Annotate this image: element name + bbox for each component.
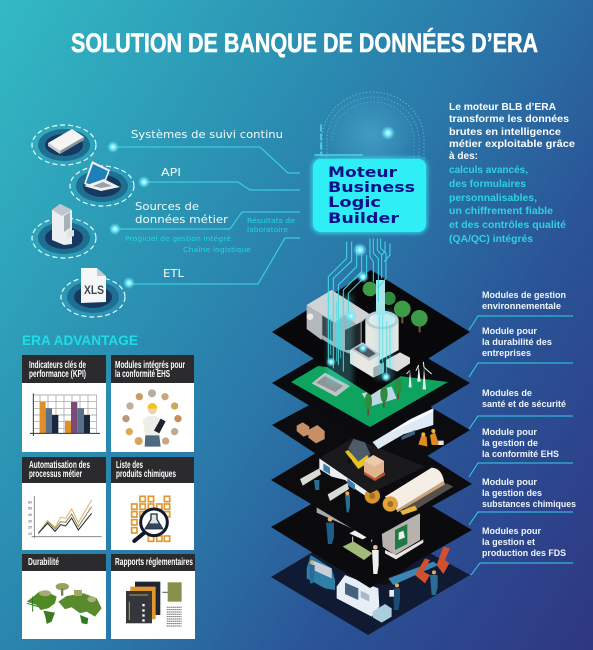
label: chemicals: Module pour xyxy=(482,477,537,487)
icon: laptop xyxy=(70,161,134,206)
card: chemicals list: Liste des xyxy=(116,460,143,471)
line chart: 60 xyxy=(28,500,32,504)
layer 5: recycling and shipping xyxy=(271,470,472,588)
label: environmental: environnementale xyxy=(482,301,561,311)
trees xyxy=(363,282,428,332)
icon: XLS file xyxy=(61,268,125,317)
label: business data sources: données métier xyxy=(135,214,229,226)
label: EHS compliance: la conformité EHS xyxy=(482,449,559,459)
forklift xyxy=(345,439,370,469)
card: KPI xyxy=(22,355,106,452)
label: sustainability xyxy=(482,326,552,358)
label: ERP: Progiciel de gestion intégré xyxy=(125,235,231,243)
layer 2: green park and wind xyxy=(272,325,470,443)
line chart: 20 xyxy=(28,526,32,530)
white wall with bays xyxy=(319,458,370,499)
text block: engine description: (QA/QC) intégrés xyxy=(449,233,533,245)
card: KPI: Indicateurs clés de xyxy=(29,360,86,371)
label: sustainability: la durabilité des xyxy=(482,337,552,347)
icon: green world map xyxy=(27,583,102,624)
label: API: API xyxy=(161,167,181,179)
card: process automation: processus métier xyxy=(29,469,82,480)
engine: dotted dome xyxy=(315,91,424,179)
line chart: 10 xyxy=(28,532,32,536)
label: laboratory results: Résultats de xyxy=(247,217,295,225)
label: chemicals: la gestion des xyxy=(482,488,542,498)
label: SDS: production des FDS xyxy=(482,548,566,558)
workers xyxy=(314,480,350,512)
text block: engine description xyxy=(449,101,575,245)
text block: engine description: et des contrôles qualité xyxy=(449,219,566,231)
label: environmental xyxy=(482,290,566,311)
text block: engine description: un chiffrement fiable xyxy=(449,205,553,217)
boiler building xyxy=(307,290,370,358)
icon: monitoring device xyxy=(32,125,96,165)
circuit glow nodes xyxy=(326,243,391,382)
card: sustainability: Durabilité xyxy=(28,557,59,568)
orange workers xyxy=(418,429,444,447)
icon: XLS file: XLS xyxy=(84,283,104,297)
line chart: 30 xyxy=(28,519,32,523)
bar chart xyxy=(30,393,100,436)
label: ETL: ETL xyxy=(163,268,184,280)
engine: Moteur Business Logic Builder box xyxy=(312,158,427,233)
card: process automation: Automatisation des xyxy=(29,460,90,471)
label: health and safety xyxy=(482,388,566,409)
card: regulatory reports xyxy=(111,554,195,639)
label: sustainability: Module pour xyxy=(482,326,537,336)
icon: magnifier over flask xyxy=(132,496,170,541)
raised roof xyxy=(319,438,425,493)
rolls xyxy=(365,468,453,515)
label: EHS compliance: Module pour xyxy=(482,427,537,437)
service building xyxy=(350,342,410,378)
icon: server tower xyxy=(32,204,96,258)
engine: Moteur Business Logic Builder box: Logic xyxy=(328,195,381,211)
label: health and safety: Modules de xyxy=(482,388,532,398)
text block: engine description: brutes en intelligence xyxy=(449,126,561,138)
text block: engine description: personnalisables, xyxy=(449,192,537,204)
icon: report stack xyxy=(126,582,182,626)
card: regulatory reports: Rapports réglementaires xyxy=(115,557,193,568)
text block: engine description: transforme les données xyxy=(449,113,569,125)
label: EHS compliance: la gestion de xyxy=(482,438,538,448)
line chart xyxy=(28,496,102,538)
white wall xyxy=(369,408,433,449)
layer 4: warehouse and rolls xyxy=(271,420,472,540)
label: environmental: Modules de gestion xyxy=(482,290,566,300)
text block: engine description: Le moteur BLB d’ERA xyxy=(449,101,556,113)
label: business data sources xyxy=(135,201,229,226)
panel: data sources xyxy=(32,125,300,317)
card: KPI: performance (KPI) xyxy=(29,369,86,380)
label: health and safety: santé et de sécurité xyxy=(482,399,566,409)
connector glow dots xyxy=(107,141,150,289)
heading: ERA ADVANTAGE xyxy=(22,332,138,348)
text block: engine description: calculs avancés, xyxy=(449,164,528,176)
engine: Moteur Business Logic Builder box: Business xyxy=(328,180,415,196)
layer 6: production floor xyxy=(271,519,470,635)
layer 1: plant xyxy=(272,270,470,395)
card: process automation xyxy=(22,457,106,550)
silo xyxy=(365,311,399,360)
engine: Moteur Business Logic Builder box: Moteur xyxy=(328,165,398,181)
layer 3: yard and loading xyxy=(272,372,470,493)
card: chemicals list: produits chimiques xyxy=(116,469,176,480)
storage machines xyxy=(300,468,349,501)
card: sustainability xyxy=(22,554,106,639)
label: SDS xyxy=(482,526,566,558)
text block: engine description: des formulaires xyxy=(449,178,526,190)
label: EHS compliance xyxy=(482,427,559,459)
label: chemicals xyxy=(482,477,576,509)
card: EHS modules xyxy=(111,355,194,452)
label: laboratory results xyxy=(247,217,295,234)
card: EHS modules: la conformité EHS xyxy=(115,369,170,380)
card: chemicals list xyxy=(111,457,194,550)
panel: ERA advantage xyxy=(22,332,195,639)
label: business data sources: Sources de xyxy=(135,201,199,213)
boxes xyxy=(297,422,325,443)
circuit traces xyxy=(328,238,390,378)
engine: Moteur Business Logic Builder box: Builder xyxy=(328,211,400,227)
line chart: 50 xyxy=(28,507,32,511)
line chart: 40 xyxy=(28,513,32,517)
label: chemicals: substances chimiques xyxy=(482,499,576,509)
card: EHS modules: Modules intégrés pour xyxy=(115,360,185,371)
label: SDS: la gestion et xyxy=(482,537,535,547)
icon: safety worker xyxy=(122,389,182,447)
label: SDS: Modules pour xyxy=(482,526,541,536)
label: laboratory results: laboratoire xyxy=(247,226,288,234)
label: continuous monitoring: Systèmes de suivi continu xyxy=(131,129,283,141)
text block: engine description: métier exploitable grâce xyxy=(449,138,575,150)
label: sustainability: entreprises xyxy=(482,348,531,358)
cargo box xyxy=(364,455,385,481)
text block: engine description: à des: xyxy=(449,150,478,162)
illustration: isometric factory stack xyxy=(271,270,472,635)
connector lines xyxy=(113,147,300,284)
label: supply chain: Chaîne logistique xyxy=(183,246,251,254)
circuit beam xyxy=(327,295,394,385)
panel: module labels xyxy=(469,290,576,575)
leader lines xyxy=(469,316,573,575)
chimney xyxy=(376,280,385,315)
